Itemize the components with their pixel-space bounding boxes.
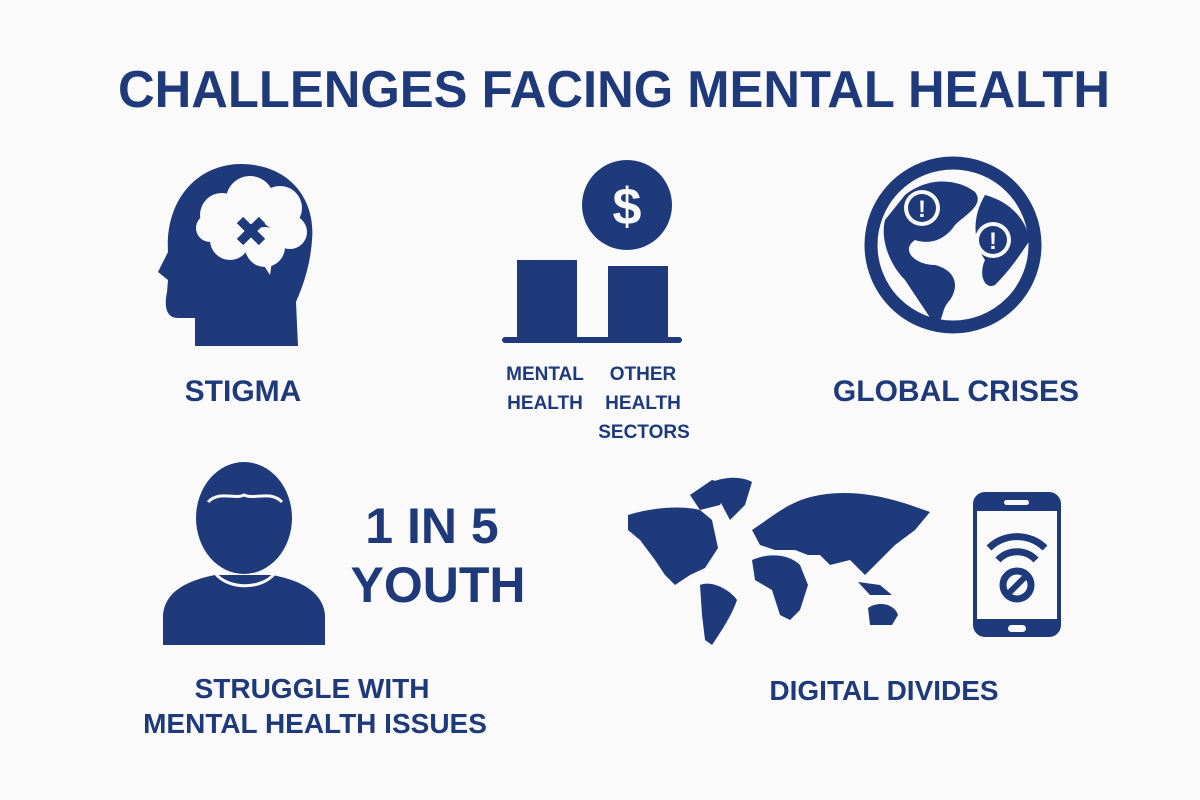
bar labels: HEALTH bbox=[507, 393, 583, 414]
bar labels: SECTORS bbox=[598, 422, 690, 443]
stat: 1 in 5 youth: 1 IN 5 bbox=[365, 498, 499, 554]
icon: person bbox=[163, 462, 325, 645]
bar labels: HEALTH bbox=[605, 393, 681, 414]
panel: youth bbox=[143, 462, 526, 739]
bar labels: OTHER bbox=[610, 364, 677, 385]
bar labels bbox=[506, 364, 690, 443]
panel: stigma bbox=[158, 164, 312, 408]
label: struggle: STRUGGLE WITH bbox=[195, 673, 429, 704]
panel: digital divides bbox=[628, 478, 1061, 706]
icon: head with thought cloud bbox=[158, 164, 312, 346]
bar chart bbox=[502, 260, 682, 343]
panel: funding bar chart bbox=[502, 160, 690, 443]
panel: global crises bbox=[833, 163, 1079, 408]
label: struggle bbox=[143, 673, 487, 739]
stat: 1 in 5 youth: YOUTH bbox=[350, 557, 526, 613]
label: stigma: STIGMA bbox=[185, 375, 301, 408]
icon: phone with no signal bbox=[973, 492, 1061, 637]
label: digital divides: DIGITAL DIVIDES bbox=[769, 675, 999, 706]
icon: globe with alerts: ! bbox=[989, 228, 997, 255]
icon: dollar coin bbox=[582, 160, 672, 250]
icon: globe with alerts: ! bbox=[918, 196, 926, 223]
bar labels: MENTAL bbox=[506, 364, 584, 385]
label: global crises: GLOBAL CRISES bbox=[833, 375, 1079, 408]
icon: dollar coin: $ bbox=[613, 178, 642, 236]
stat: 1 in 5 youth bbox=[350, 498, 526, 613]
icon: globe with alerts bbox=[871, 163, 1035, 327]
label: struggle: MENTAL HEALTH ISSUES bbox=[143, 708, 487, 739]
icon: world map bbox=[628, 478, 930, 645]
title: CHALLENGES FACING MENTAL HEALTH bbox=[118, 61, 1110, 119]
